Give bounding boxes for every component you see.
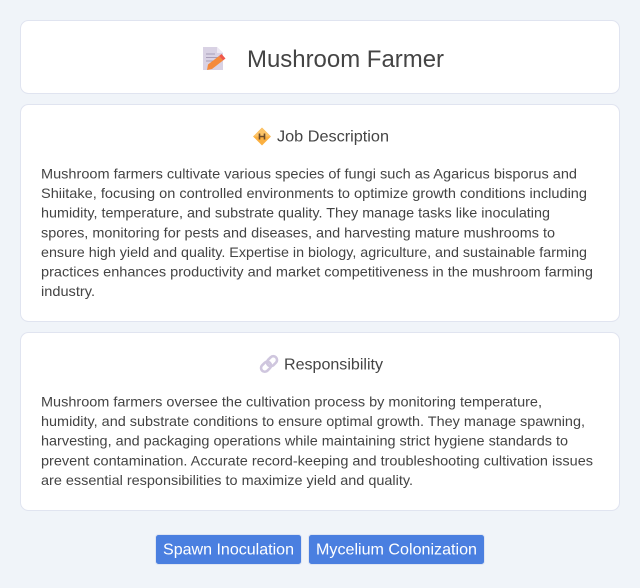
text: job description body: humidity, temperature, and substrate quality. They manage tasks like inoculating xyxy=(41,205,550,221)
text: responsibility body: humidity, and substrate conditions to ensure optimal growth. They manage spawning, xyxy=(41,413,585,429)
text: job description body xyxy=(41,166,593,299)
title: Mushroom Farmer xyxy=(247,46,444,73)
text: responsibility body: prevent contamination. Accurate record-keeping and troubleshooting cultivation issues xyxy=(41,452,593,468)
tag: spawn inoculation: Spawn Inoculation xyxy=(163,542,294,558)
tag: mycelium colonization: Mycelium Colonization xyxy=(316,542,477,558)
text: responsibility body xyxy=(41,394,593,488)
text: job description body: Mushroom farmers cultivate various species of fungi such as Agaricus bisporus and xyxy=(41,166,577,182)
text: job description body: industry. xyxy=(41,283,95,299)
text: job description body: practices enhances productivity and market competitiveness in the mushroom farming xyxy=(41,264,593,280)
icon: chain link xyxy=(259,355,279,373)
heading: responsibility: Responsibility xyxy=(284,356,383,374)
text: responsibility body: are essential responsibilities to maximize yield and quality. xyxy=(41,472,413,488)
tag: spawn inoculation xyxy=(156,534,302,564)
text: responsibility body: Mushroom farmers oversee the cultivation process by monitoring temperature, xyxy=(41,394,542,410)
text: job description body: Shiitake, focusing on controlled environments to optimize growth conditions including xyxy=(41,185,587,201)
heading: job description: Job Description xyxy=(277,128,389,146)
panel: title card xyxy=(20,20,620,94)
tag: mycelium colonization xyxy=(308,534,484,564)
text: job description body: ensure high yield and quality. Expertise in biology, agriculture, and sustainable farming xyxy=(41,244,587,260)
icon: document with pencil xyxy=(203,47,226,70)
panel: responsibility xyxy=(20,332,620,510)
icon: orange diamond sign xyxy=(254,128,270,145)
text: responsibility body: harvesting, and packaging operations while maintaining strict hygiene standards to xyxy=(41,433,568,449)
panel: job description xyxy=(20,104,620,322)
text: job description body: spores, monitoring for pests and diseases, and harvesting mature mushrooms to xyxy=(41,224,555,240)
